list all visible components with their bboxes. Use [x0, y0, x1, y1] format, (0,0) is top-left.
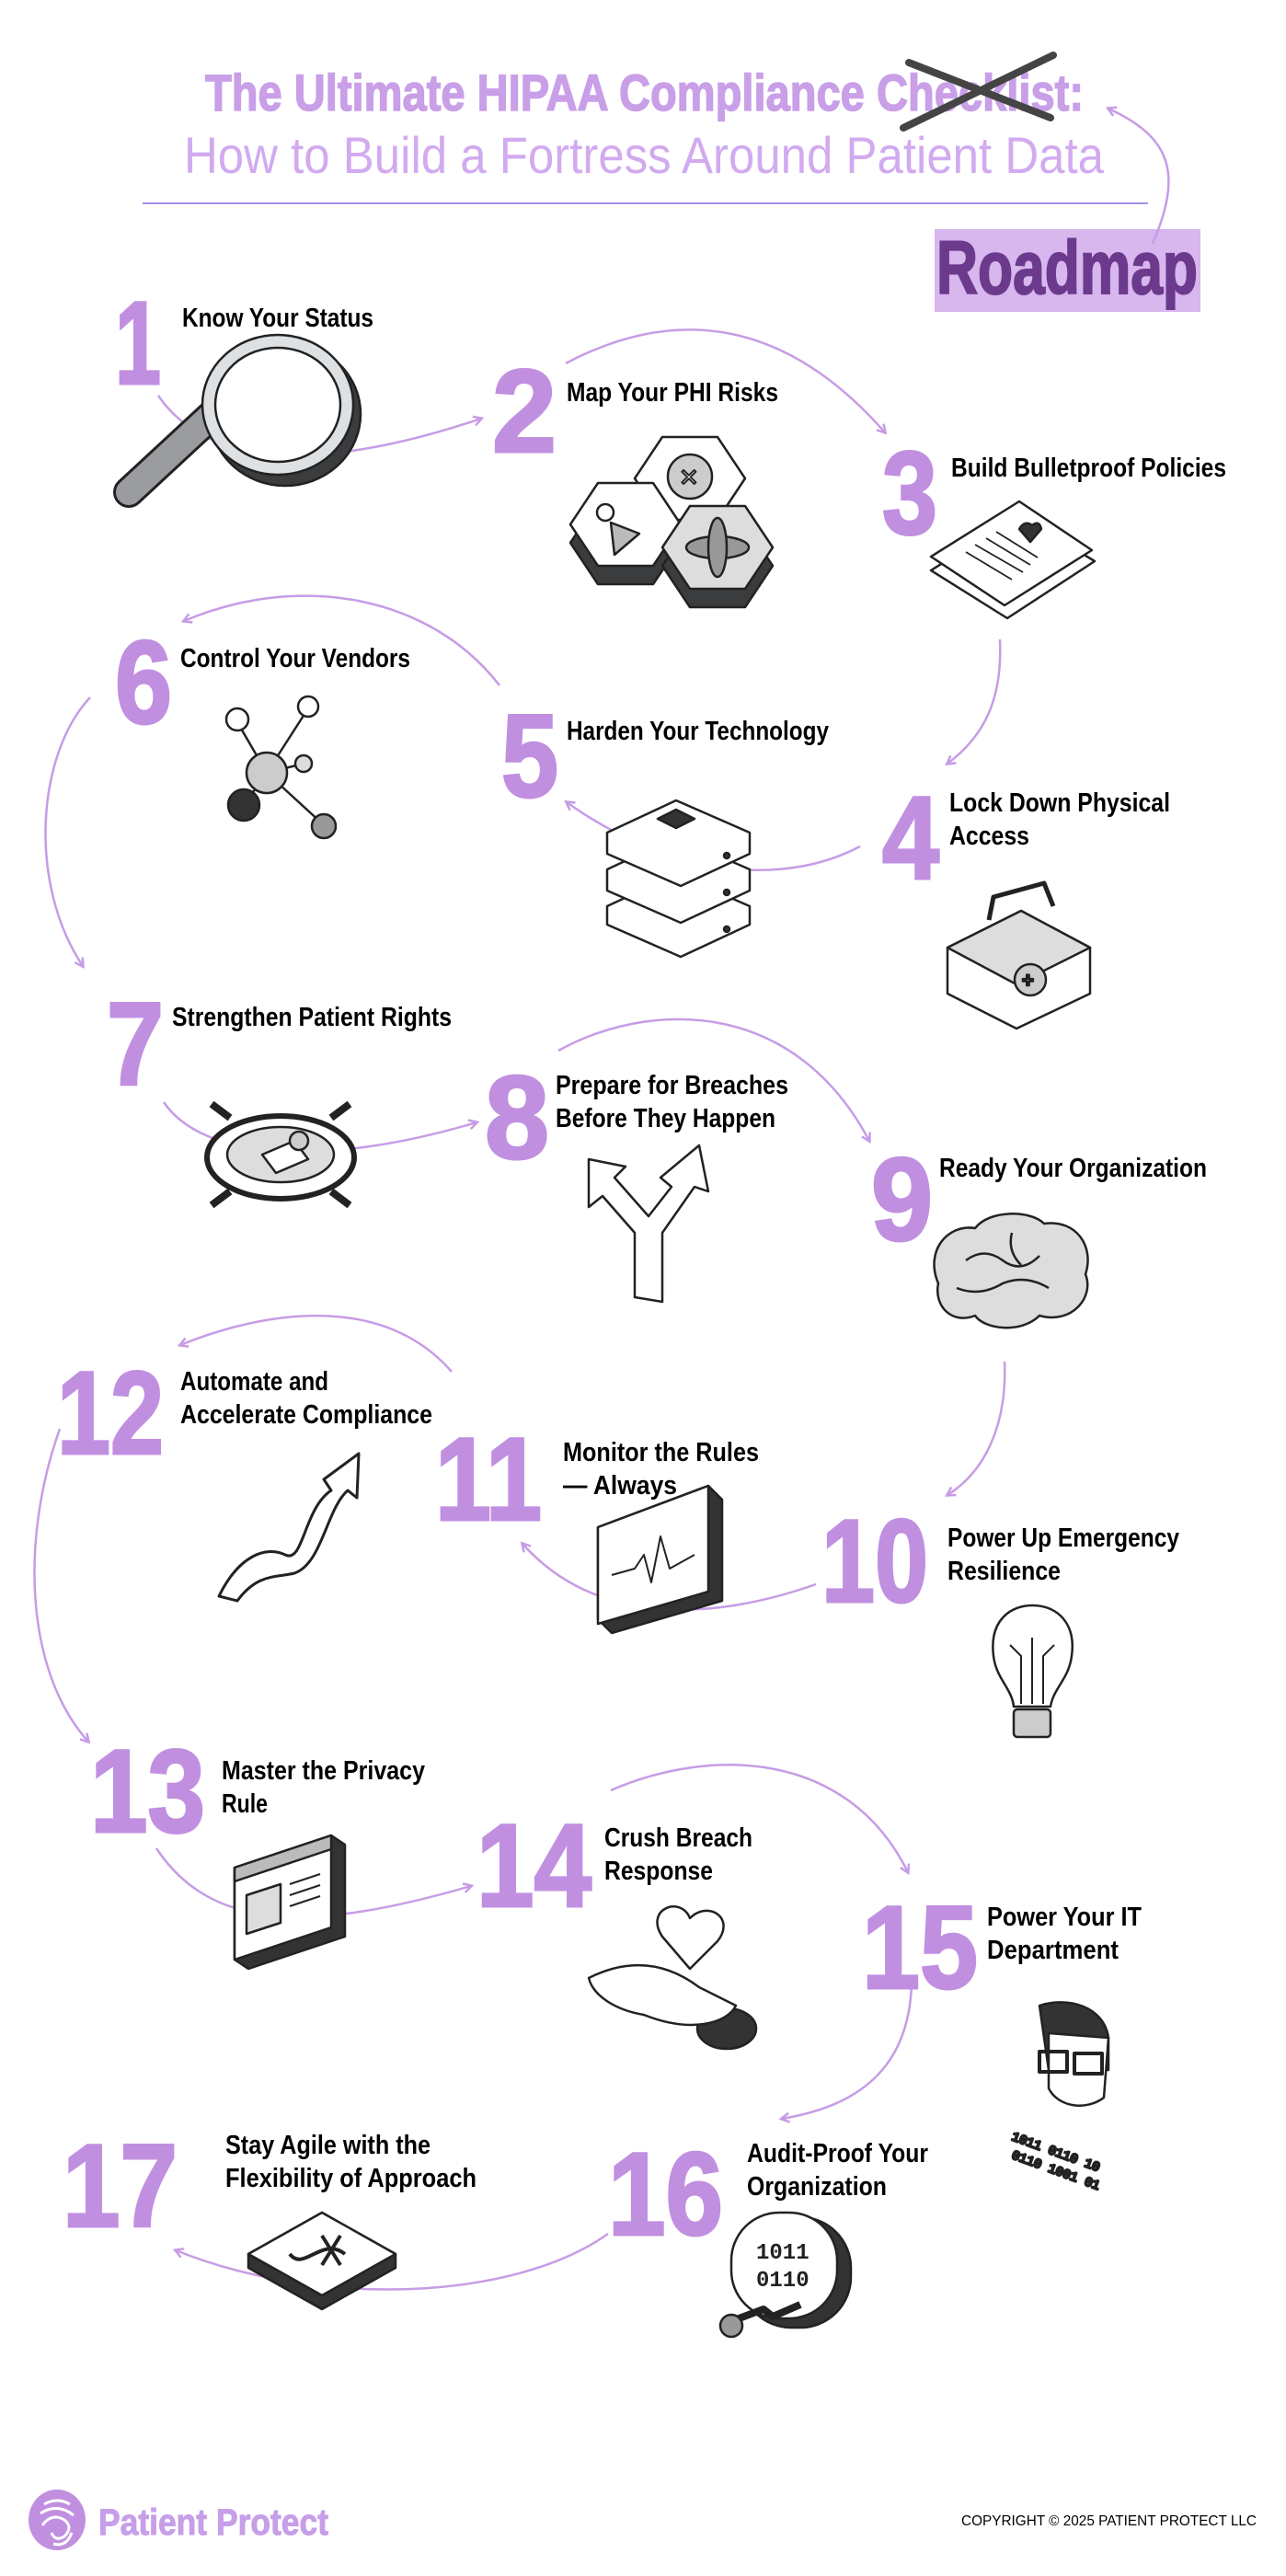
icon: server stack	[607, 800, 750, 957]
icon: target frame	[207, 1104, 354, 1205]
icon: medical case	[947, 883, 1090, 1029]
title: The Ultimate HIPAA Compliance Checklist:	[205, 63, 1084, 121]
step 5: Harden Your Technology	[567, 717, 829, 746]
step 17: 17	[63, 2121, 178, 2252]
icon: rising trend arrow	[219, 1454, 359, 1601]
step 13: 13	[90, 1726, 205, 1857]
step 6	[115, 617, 410, 838]
icon: logo swirl	[29, 2490, 86, 2550]
subtitle: How to Build a Fortress Around Patient Data	[184, 126, 1105, 184]
arrow 12 to 13	[34, 1429, 88, 1742]
step 6: 6	[115, 617, 172, 749]
step 13	[90, 1726, 425, 1969]
step 9: 9	[871, 1134, 933, 1266]
icon: IT person: 1011 0110 10	[1009, 2130, 1102, 2176]
icon: hexagons	[570, 437, 773, 607]
arrow 9 to 10	[947, 1362, 1005, 1495]
arrow 6 to 7	[45, 697, 90, 966]
arrow: roadmap to title	[1108, 109, 1168, 244]
icon: diverging arrows	[589, 1145, 708, 1302]
step 16: Organization	[747, 2172, 887, 2202]
step 15: 15	[862, 1882, 978, 2014]
icon: cross-out mark	[903, 55, 1053, 128]
step 13: Rule	[222, 1789, 268, 1819]
step 8	[485, 1052, 788, 1302]
step 10	[821, 1496, 1179, 1737]
step 11	[435, 1414, 759, 1633]
arrow 11 to 12	[180, 1316, 452, 1372]
icon: light bulb	[993, 1605, 1073, 1737]
icon: hand with heart	[589, 1906, 756, 2049]
step 5	[501, 691, 829, 957]
step 10: 10	[821, 1496, 928, 1627]
arrow 16 to 17	[176, 2234, 608, 2290]
arrow 2 to 3	[566, 329, 885, 432]
icon: binary key	[720, 2213, 851, 2337]
step 3: 3	[882, 428, 937, 559]
step 4: 4	[882, 773, 939, 904]
step 14: Response	[604, 1857, 713, 1886]
icon: molecule network	[226, 696, 336, 838]
icon: binary key: 1011	[756, 2241, 809, 2266]
icon: browser window	[235, 1835, 345, 1969]
arrow 5 to 6	[184, 596, 499, 685]
step 12: Automate and	[180, 1367, 328, 1397]
step 13: Master the Privacy	[222, 1756, 425, 1786]
step 11: — Always	[563, 1471, 677, 1501]
icon: magnifier	[129, 335, 361, 492]
arrow 10 to 11	[522, 1544, 816, 1610]
step 7	[107, 979, 452, 1205]
step 15	[862, 1882, 1142, 2194]
step 4	[882, 773, 1170, 1029]
icon: IT person: 0110 1001 01	[1009, 2148, 1102, 2194]
step 2: 2	[492, 346, 557, 477]
step 9	[871, 1134, 1207, 1328]
step 4: Lock Down Physical	[949, 788, 1170, 818]
icon: IT person	[1009, 2002, 1108, 2194]
step 7: Strengthen Patient Rights	[172, 1003, 452, 1032]
icon: documents	[931, 501, 1095, 618]
step 17: Stay Agile with the	[225, 2131, 431, 2160]
step 2	[492, 346, 778, 607]
icon: medical case: +	[1022, 969, 1034, 992]
step 16	[608, 2129, 928, 2337]
step 15: Department	[987, 1936, 1119, 1965]
roadmap badge: Roadmap	[936, 226, 1198, 310]
arrow 7 to 8	[164, 1102, 477, 1152]
step 10: Power Up Emergency	[947, 1524, 1179, 1553]
step 11: 11	[435, 1414, 542, 1546]
arrow 15 to 16	[782, 1980, 912, 2119]
arrow 8 to 9	[558, 1019, 869, 1141]
arrows between steps	[34, 329, 1005, 2290]
step 17: Flexibility of Approach	[225, 2164, 477, 2193]
step 1: Know Your Status	[182, 304, 373, 333]
title	[205, 55, 1084, 128]
step 14	[477, 1800, 756, 2049]
arrow 13 to 14	[156, 1848, 471, 1917]
step 12: Accelerate Compliance	[180, 1400, 432, 1430]
step 8: 8	[485, 1052, 549, 1184]
step 11: Monitor the Rules	[563, 1438, 759, 1467]
step 15: Power Your IT	[987, 1903, 1142, 1932]
step 2: Map Your PHI Risks	[567, 378, 778, 408]
step 16: 16	[608, 2129, 723, 2260]
step 16: Audit-Proof Your	[747, 2139, 928, 2168]
icon: agile tile	[248, 2213, 396, 2309]
arrow 14 to 15	[611, 1765, 908, 1872]
step 14: 14	[477, 1800, 591, 1932]
step 10: Resilience	[947, 1557, 1061, 1586]
step 1	[115, 278, 373, 492]
step 8: Prepare for Breaches	[556, 1071, 788, 1100]
step 1: 1	[115, 278, 161, 409]
step 8: Before They Happen	[556, 1104, 775, 1133]
step 9: Ready Your Organization	[939, 1154, 1207, 1183]
icon: brain	[935, 1213, 1088, 1328]
arrow 1 to 2	[158, 396, 481, 455]
copyright: COPYRIGHT © 2025 PATIENT PROTECT LLC	[961, 2513, 1257, 2529]
icon: heart monitor	[598, 1486, 722, 1633]
arrow 4 to 5	[567, 802, 860, 870]
step 3	[882, 428, 1226, 618]
step 4: Access	[949, 822, 1029, 851]
step 12: 12	[57, 1348, 164, 1479]
step 7: 7	[107, 979, 164, 1110]
footer logo	[29, 2490, 328, 2550]
step 3: Build Bulletproof Policies	[951, 454, 1226, 483]
icon: binary key: 0110	[756, 2269, 809, 2294]
step 6: Control Your Vendors	[180, 644, 410, 673]
step 5: 5	[501, 691, 558, 822]
step 14: Crush Breach	[604, 1823, 752, 1853]
arrow 3 to 4	[947, 639, 1000, 764]
step 17	[63, 2121, 477, 2309]
step 12	[57, 1348, 432, 1601]
footer logo: Patient Protect	[98, 2502, 328, 2543]
icon: hexagons: ✕	[679, 464, 699, 491]
